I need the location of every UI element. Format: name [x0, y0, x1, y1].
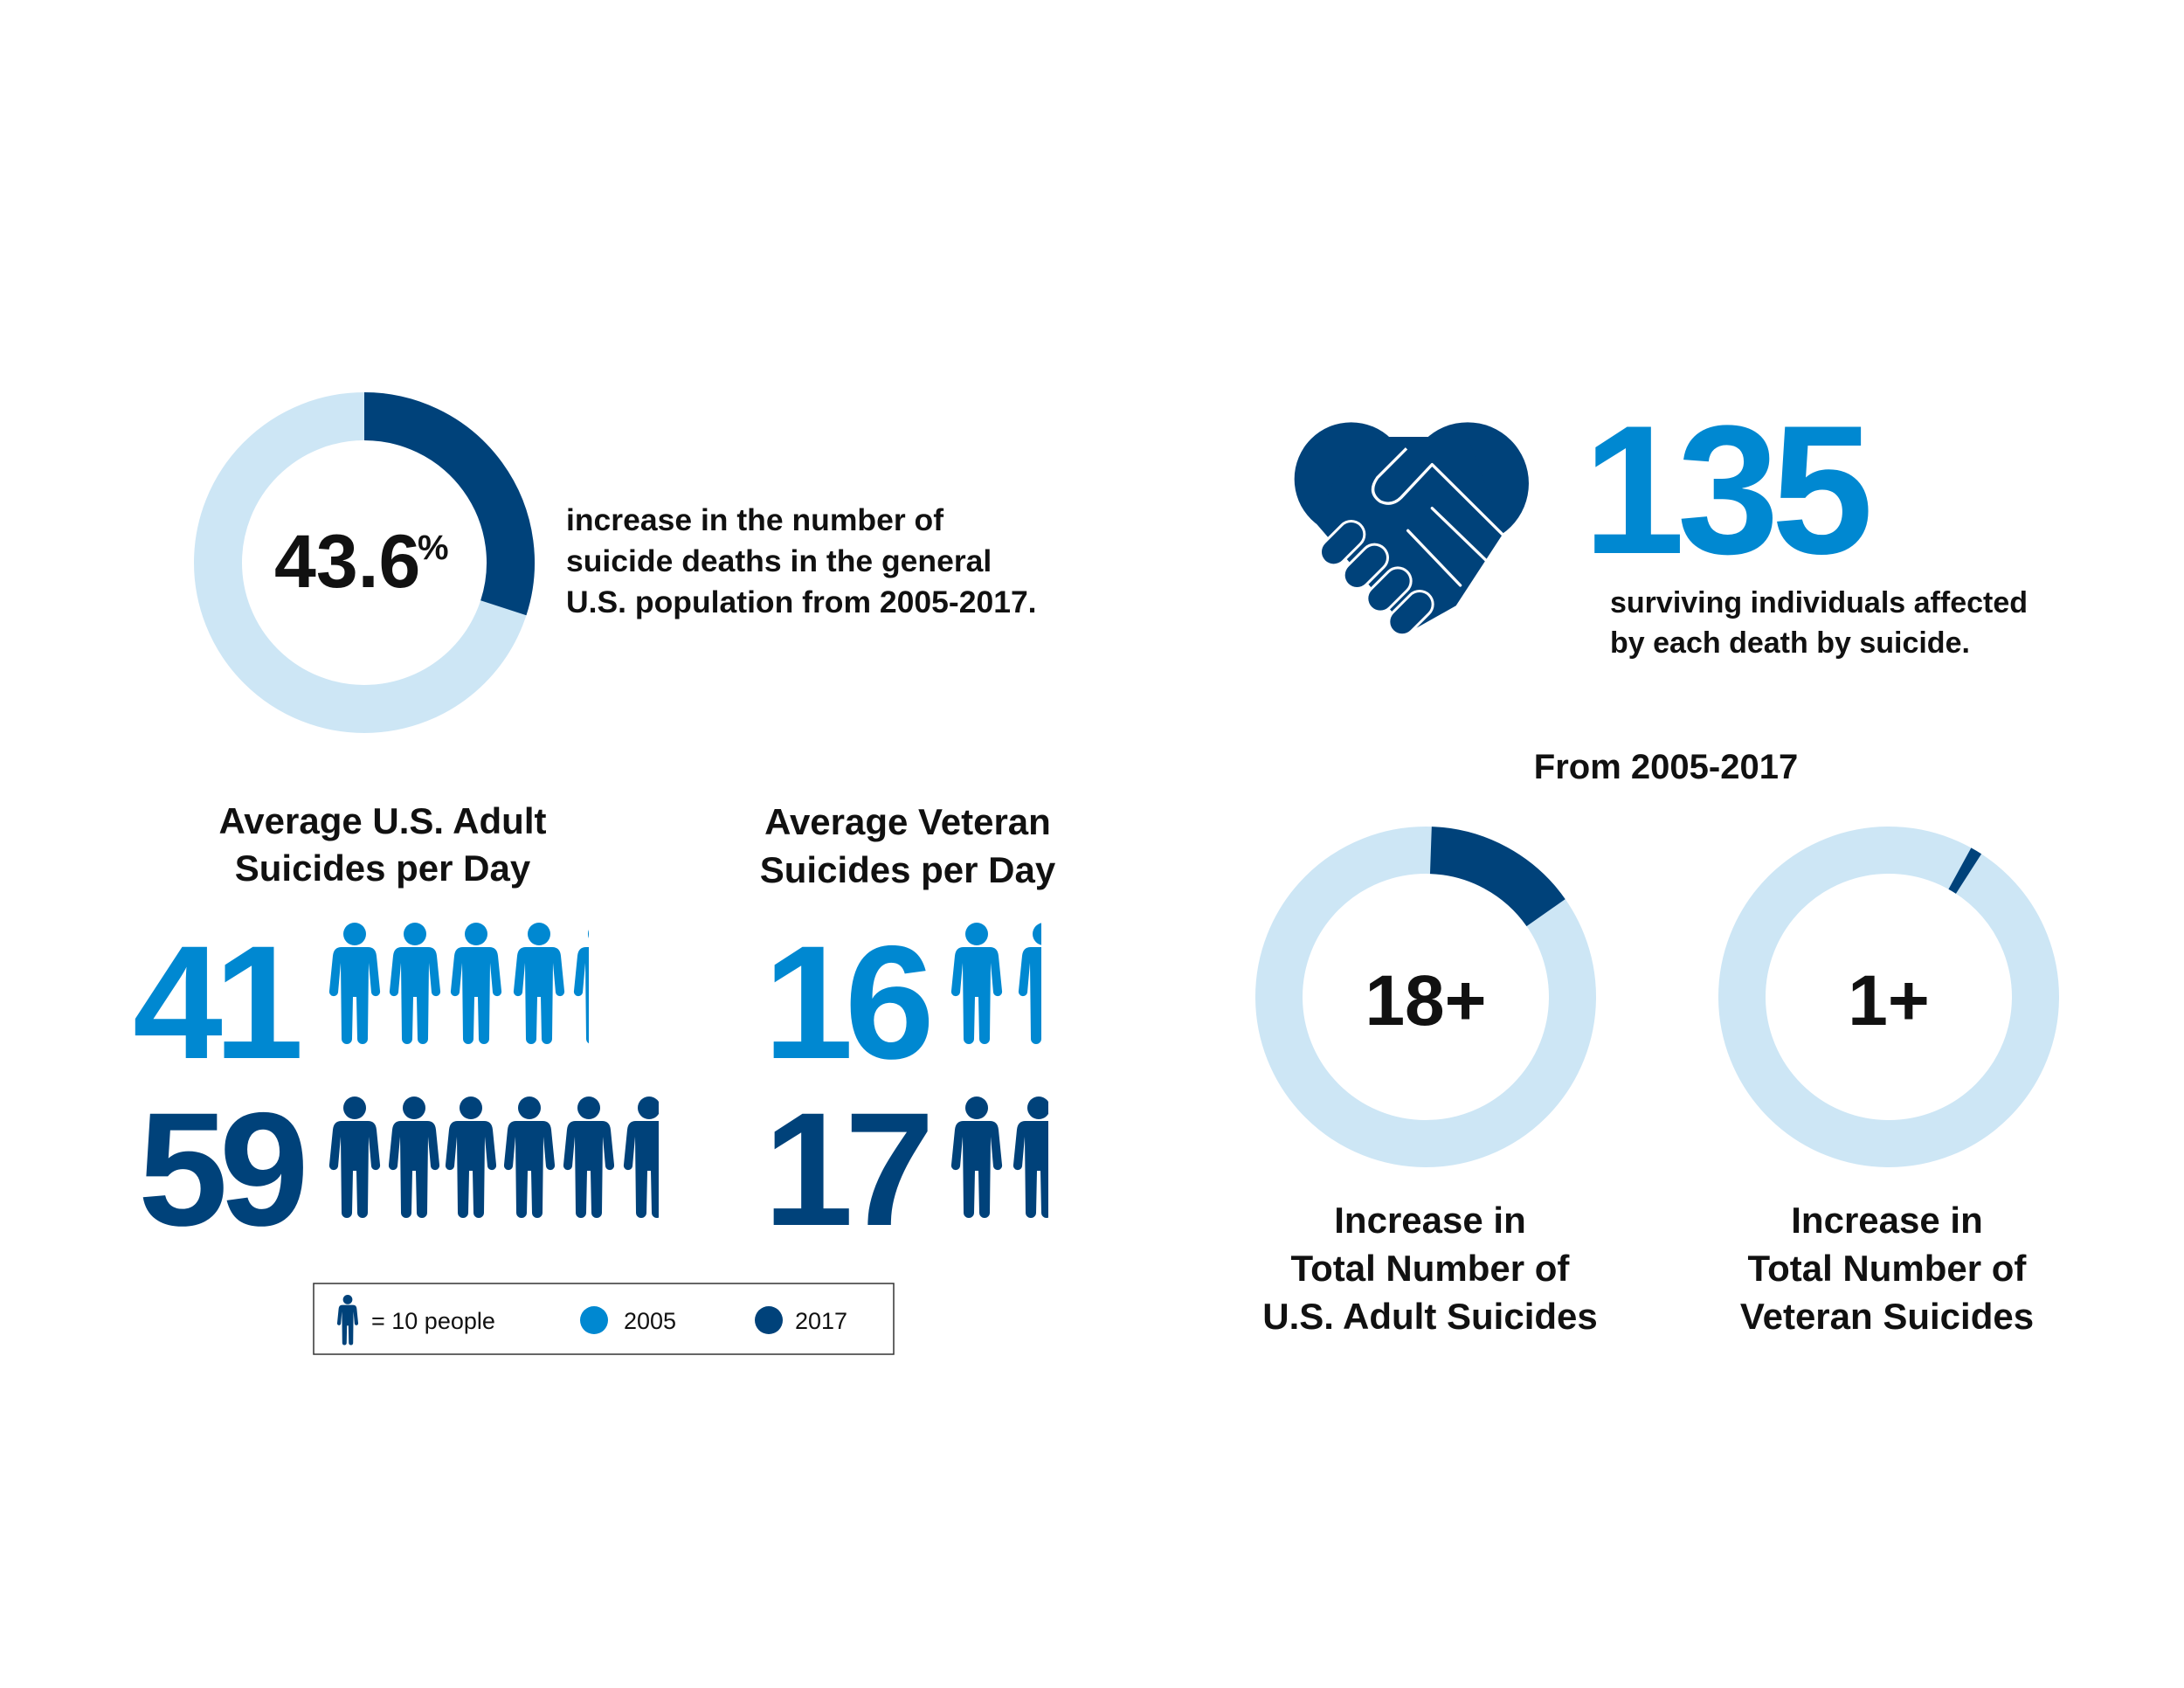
label: adult suicides: U.S. Adult Suicides — [1262, 1296, 1598, 1337]
heading: veteran per day — [760, 801, 1056, 890]
label: adult suicides — [1262, 1200, 1598, 1337]
legend — [314, 1283, 894, 1354]
donut: adult suicides increase: 18+ — [1365, 961, 1487, 1041]
text: surviving individuals — [1610, 586, 2028, 660]
heading: veteran per day: Average Veteran — [764, 801, 1051, 842]
label: veteran suicides: Veteran Suicides — [1740, 1296, 2034, 1337]
text: surviving individuals: by each death by suicide. — [1610, 626, 1970, 660]
label: veteran suicides — [1740, 1200, 2034, 1337]
number 41: 41 — [133, 913, 300, 1093]
people row: veteran 2017 — [950, 1097, 1048, 1218]
heading: adult per day: Suicides per Day — [235, 847, 531, 889]
heading: From 2005-2017: From 2005-2017 — [1534, 748, 1798, 786]
heading: veteran per day: Suicides per Day — [760, 849, 1056, 890]
text: increase description — [566, 502, 1037, 619]
legend 2017: 2017 — [795, 1308, 847, 1334]
number 17: 17 — [764, 1080, 928, 1260]
big number 135: 135 — [1583, 387, 1869, 592]
legend icon: person — [337, 1295, 358, 1346]
donut value: 43.6 — [274, 520, 420, 604]
number 16: 16 — [764, 913, 930, 1093]
donut: veteran suicides increase: 1+ — [1848, 961, 1930, 1041]
label: adult suicides: Increase in — [1334, 1200, 1526, 1241]
text: surviving individuals: surviving individuals affected — [1610, 586, 2028, 619]
people row: adult 2005 — [328, 923, 589, 1044]
text: increase description: increase in the number of — [566, 502, 943, 537]
heading: adult per day — [219, 800, 546, 889]
text: increase description: U.S. population from 2005-2017. — [566, 585, 1037, 619]
people row: veteran 2005 — [950, 923, 1041, 1044]
icon: heart handshake — [1295, 422, 1529, 632]
donut: adult suicides increase — [1279, 850, 1572, 1144]
legend 2005 — [580, 1306, 676, 1334]
donut value: % — [418, 529, 449, 567]
legend 2017 — [755, 1306, 847, 1334]
legend: = 10 people — [371, 1308, 495, 1334]
donut: 43.6% increase — [218, 416, 511, 709]
label: veteran suicides: Increase in — [1791, 1200, 1983, 1241]
label: adult suicides: Total Number of — [1291, 1248, 1570, 1289]
legend 2005: 2005 — [624, 1308, 676, 1334]
number 59: 59 — [138, 1080, 304, 1260]
heading: adult per day: Average U.S. Adult — [219, 800, 546, 841]
people row: adult 2017 — [329, 1097, 674, 1218]
donut: veteran suicides increase — [1742, 850, 2035, 1144]
text: increase description: suicide deaths in the general — [566, 543, 992, 578]
label: veteran suicides: Total Number of — [1748, 1248, 2027, 1289]
